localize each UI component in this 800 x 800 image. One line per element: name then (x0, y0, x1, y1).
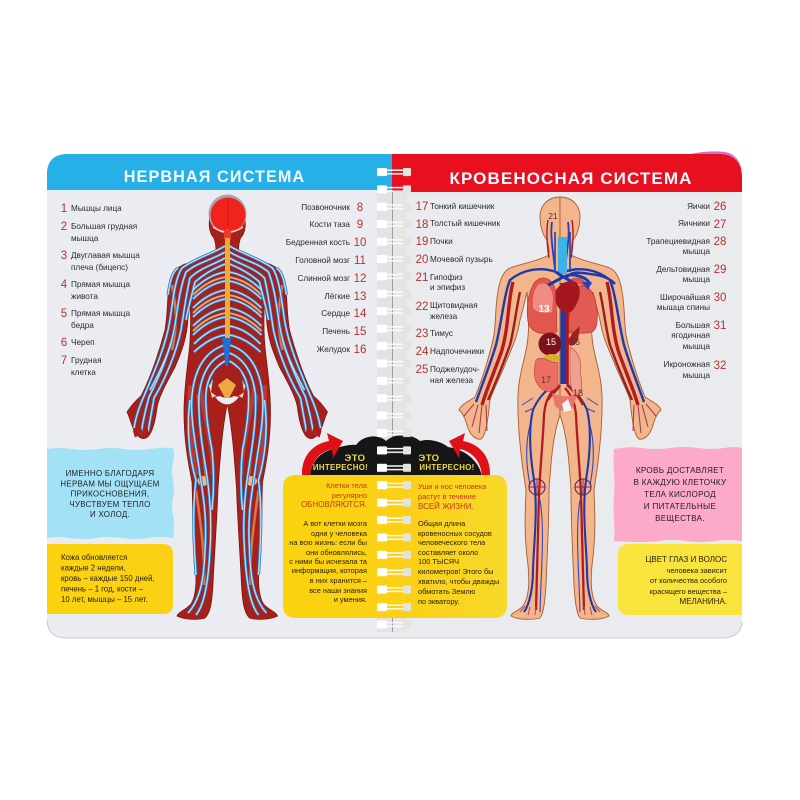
left parts list: 5 (61, 308, 67, 320)
left page second list: Лёгкие (324, 292, 350, 301)
book spine (377, 190, 407, 632)
left page second list: Желудок (317, 345, 350, 354)
right page first list: 17 (416, 201, 428, 213)
callout: blood (pink): И ПИТАТЕЛЬНЫЕ (644, 502, 717, 511)
callout: skin renewal (yellow): печень – 1 год, кости – (61, 584, 144, 594)
organ numbers: 15 (546, 337, 556, 347)
callout: skin renewal (yellow): кровь – каждые 150 дней, (61, 574, 155, 583)
callout: nerves (blue) (47, 448, 174, 539)
spinal cord (222, 238, 231, 366)
organ numbers: 13 (538, 304, 550, 315)
left parts list: Большая грудная (71, 222, 137, 231)
arrow: left red (302, 433, 343, 476)
left page second list: 13 (354, 291, 366, 303)
right page second list: 30 (714, 292, 726, 304)
left parts list: Грудная (71, 356, 102, 365)
callout: nerves (blue): ПРИКОСНОВЕНИЯ, (71, 490, 149, 499)
callout: nerves (blue): ИМЕННО БЛАГОДАРЯ (66, 469, 154, 478)
heading: nervous system: НЕРВНАЯ СИСТЕМА (124, 168, 305, 186)
callout text left: ИНТЕРЕСНО! (313, 463, 368, 472)
callout: cell renewal (yellow): одни у человека (311, 529, 368, 538)
left parts list: мышца (71, 234, 99, 243)
callout: cell renewal (yellow): Клетки тела (326, 481, 368, 490)
intestines (534, 347, 582, 397)
right page first list (416, 201, 500, 385)
organ numbers: 16 (570, 337, 580, 347)
right page first list: Толстый кишечник (430, 219, 500, 228)
left page second list: Бедренная кость (286, 238, 350, 247)
callout: cell renewal (yellow): информация, которая (292, 566, 367, 575)
right page first list: Тонкий кишечник (430, 202, 495, 211)
callout: cell renewal (yellow): в них хранится – (310, 576, 368, 585)
left page second list: Кости таза (310, 220, 350, 229)
right page first list: 18 (416, 219, 428, 231)
left parts list: Двуглавая мышца (71, 251, 140, 260)
callout: cell renewal (yellow): ОБНОВЛЯЮТСЯ. (301, 500, 367, 509)
callout: skin renewal (yellow): каждые 2 недели, (61, 564, 125, 572)
right page first list: 22 (416, 301, 428, 313)
organ numbers (538, 212, 583, 398)
right page second list: мышца (683, 247, 710, 256)
callout: vessels length (yellow): составляет около (418, 548, 478, 557)
left parts list: Мышцы лица (71, 204, 122, 213)
callout: cell renewal (yellow): на всю жизнь: если бы (289, 538, 367, 547)
callout: vessels length (yellow): человеческого тела (418, 538, 486, 547)
right page second list: Трапециевидная (646, 237, 710, 246)
right page second list: Икроножная (663, 360, 710, 369)
callout: cell renewal (yellow): и умения. (334, 595, 367, 604)
right page second list: Яичники (678, 219, 710, 228)
left parts list: Прямая мышца (71, 280, 130, 289)
right page first list: Почки (430, 237, 453, 246)
right page first list: и эпифиз (430, 283, 465, 292)
callout: nerves (blue): НЕРВАМ МЫ ОЩУЩАЕМ (60, 479, 160, 488)
left page second list: Головной мозг (295, 256, 350, 265)
left page second list: 16 (354, 344, 366, 356)
left page second list: 14 (354, 308, 367, 320)
callout: skin renewal (yellow): Кожа обновляется (61, 553, 127, 562)
callout text right: ЭТО (419, 453, 439, 464)
left page second list: Слинной мозг (297, 274, 350, 283)
right page first list: Гипофиз (430, 273, 463, 282)
organ numbers: 18 (573, 388, 583, 398)
left page second list: Печень (322, 327, 350, 336)
callout: skin renewal (yellow): 10 лет, мышцы – 15 лет. (61, 595, 148, 604)
main vessels (548, 272, 583, 405)
left parts list: живота (71, 292, 98, 301)
right page first list: Тимус (430, 329, 453, 338)
left parts list: Череп (71, 338, 95, 347)
right page first list: 21 (416, 272, 428, 284)
callout: eye colour (yellow): ЦВЕТ ГЛАЗ И ВОЛОС (645, 555, 727, 564)
callout: cell renewal (yellow): регулярно (332, 491, 367, 500)
right page first list: Поджелудоч- (430, 365, 480, 374)
liver (538, 332, 562, 356)
figure: circulatory system body (459, 197, 661, 619)
bladder (552, 392, 578, 411)
arrow: right red (449, 433, 490, 476)
figure: nervous system body (127, 194, 328, 619)
callout: cell renewal (yellow): они обновлялись, (306, 548, 367, 557)
left page second list: Позвоночник (301, 203, 350, 212)
spiral binding rings (377, 164, 413, 634)
black cloud callout: this is interesting (302, 433, 490, 476)
callout: vessels length (yellow): Общая длина (418, 519, 466, 528)
callout: vessels length (yellow): хватило, чтобы дважды (418, 577, 499, 586)
callout: vessels length (yellow): кровеносных сосудов (418, 529, 492, 538)
organ numbers: 17 (541, 375, 551, 385)
pancreas and stomach (544, 354, 560, 362)
left parts list: 3 (61, 250, 67, 262)
callout: vessels length (yellow): растут в течение (418, 492, 476, 501)
callout: vessels length (yellow): километров! Этого бы (418, 567, 493, 576)
left parts list: 2 (61, 221, 67, 233)
right page second list: Яички (687, 202, 710, 211)
right page second list: 28 (714, 236, 726, 248)
right page first list: 20 (416, 254, 428, 266)
left page second list: 12 (354, 273, 366, 285)
callout text left: ЭТО (345, 453, 365, 464)
callout: nerves (blue): И ХОЛОД. (90, 510, 130, 519)
left parts list: плеча (бицепс) (71, 263, 128, 272)
lung right (566, 286, 597, 333)
right page second list: мышца (683, 275, 710, 284)
left parts list: Прямая мышца (71, 309, 130, 318)
callout: blood (pink): В КАЖДУЮ КЛЕТОЧКУ (634, 478, 727, 487)
heading: circulatory system: КРОВЕНОСНАЯ СИСТЕМА (449, 169, 693, 188)
left parts list: клетка (71, 368, 96, 377)
header: circulatory system (392, 154, 742, 192)
right page second list: ягодичная (671, 331, 710, 340)
callout: eye colour (yellow): человека зависит (666, 566, 728, 575)
book page background (47, 151, 742, 638)
right page first list: 24 (416, 346, 429, 358)
callout: blood (pink): ВЕЩЕСТВА. (655, 514, 705, 523)
callout: nerves (blue): ЧУВСТВУЕМ ТЕПЛО (69, 500, 151, 509)
right page first list: Надпочечники (430, 347, 484, 356)
callout: blood (pink): КРОВЬ ДОСТАВЛЯЕТ (636, 466, 724, 475)
right page second list: мышца спины (657, 303, 710, 312)
callout: eye colour (yellow) (618, 544, 742, 615)
callout: eye colour (yellow): красящего вещества – (650, 587, 728, 596)
callout: blood (pink) (614, 447, 742, 542)
neck vessels (555, 232, 570, 272)
right page first list: Щитовидная (430, 301, 478, 310)
left parts list: 6 (61, 337, 67, 349)
right page second list (646, 201, 726, 380)
trachea (558, 237, 567, 274)
right page first list: 23 (416, 328, 428, 340)
callout: vessels length (yellow) (393, 475, 507, 618)
callout: vessels length (yellow): обмотать Землю (418, 587, 476, 596)
left parts list: 7 (61, 355, 67, 367)
callout: eye colour (yellow): от количества особого (650, 576, 727, 585)
right page first list: Мочевой пузырь (430, 255, 493, 264)
right page second list: 27 (714, 219, 726, 231)
left parts list: 4 (61, 279, 68, 291)
callout: vessels length (yellow): ВСЕЙ ЖИЗНИ. (418, 502, 474, 511)
callout: vessels length (yellow): по экватору. (418, 597, 459, 606)
callout: skin renewal (yellow) (47, 544, 173, 614)
right page first list: 19 (416, 236, 428, 248)
right page second list: Дельтовидная (656, 265, 710, 274)
left parts list (61, 203, 140, 377)
icon: brain (208, 194, 246, 241)
left page second list (286, 202, 367, 356)
left page second list: 8 (357, 202, 363, 214)
left parts list: бедра (71, 321, 94, 330)
right page second list: 26 (714, 201, 726, 213)
right page second list: мышца (683, 342, 710, 351)
organ numbers: 21 (549, 212, 558, 221)
callout: blood (pink): ТЕЛА КИСЛОРОД (644, 490, 716, 499)
left page second list: 10 (354, 237, 366, 249)
callout: cell renewal (yellow): А вот клетки мозга (303, 519, 368, 528)
right page second list: 31 (714, 320, 726, 332)
right page second list: мышца (683, 371, 710, 380)
left page second list: 11 (354, 255, 366, 267)
right page second list: 32 (714, 360, 726, 372)
right page second list: Большая (676, 321, 710, 330)
right page first list: 25 (416, 364, 428, 376)
left page second list: Сердце (321, 309, 350, 318)
callout: eye colour (yellow): МЕЛАНИНА. (680, 597, 727, 606)
left page second list: 15 (354, 326, 366, 338)
header: nervous system (47, 154, 392, 190)
right page first list: железа (430, 312, 458, 321)
callout: cell renewal (yellow): все наши знания (309, 586, 367, 595)
callout: cell renewal (yellow) (283, 475, 393, 618)
left page second list: 9 (357, 219, 363, 231)
heart (548, 273, 615, 313)
callout: vessels length (yellow): 100 ТЫСЯЧ (418, 557, 459, 566)
left parts list: 1 (61, 203, 67, 215)
right page second list: 29 (714, 264, 726, 276)
callout: cell renewal (yellow): с ними бы исчезала та (289, 557, 368, 566)
callout text right: ИНТЕРЕСНО! (419, 463, 475, 472)
right page second list: Широчайшая (660, 293, 710, 302)
callout: vessels length (yellow): Уши и нос человека (418, 482, 487, 491)
right page first list: ная железа (430, 376, 473, 385)
